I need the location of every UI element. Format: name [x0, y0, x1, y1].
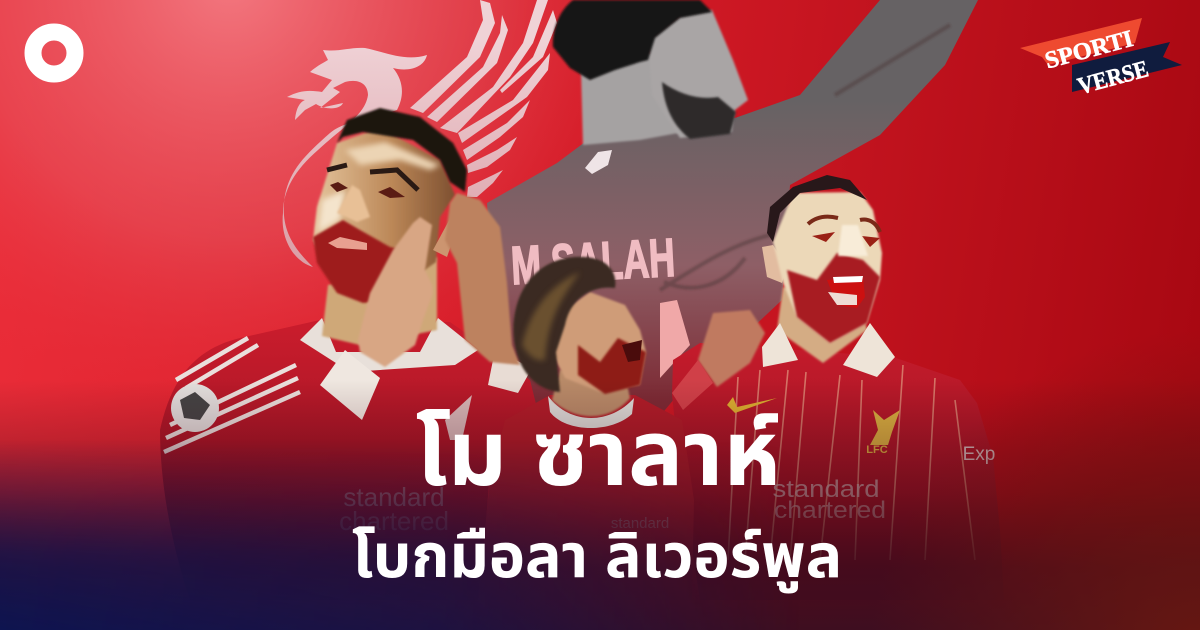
salah back view in grey jersey	[487, 0, 978, 440]
cheek highlight	[318, 190, 345, 232]
beard	[578, 338, 646, 394]
neck	[322, 257, 437, 345]
right player celebrating	[672, 175, 1004, 600]
face	[313, 128, 455, 295]
eyes	[812, 232, 880, 247]
navy ribbon	[1072, 42, 1182, 92]
orange ribbon	[1020, 18, 1142, 65]
bottom navy fade overlay	[0, 375, 1200, 630]
lips	[328, 237, 367, 250]
subtitle: โบกมือลา ลิเวอร์พูล	[352, 522, 842, 593]
sponsor text: standard	[343, 482, 445, 512]
sleeve cuff right	[488, 350, 532, 393]
shirt number fragment	[660, 300, 690, 378]
hair	[514, 257, 615, 392]
beard	[787, 253, 880, 343]
middle small player	[478, 257, 694, 600]
lfc crest	[866, 410, 900, 456]
back hand	[445, 193, 520, 365]
ear	[762, 245, 787, 283]
name print: M.SALAH	[510, 228, 677, 296]
sponsor text: standard	[611, 515, 669, 532]
jersey folds	[660, 25, 950, 290]
ear	[433, 213, 458, 257]
left player clapping	[160, 108, 540, 600]
hair	[767, 175, 867, 242]
eyes	[330, 182, 405, 198]
lfc crest: LFC	[866, 444, 888, 456]
beard	[313, 220, 428, 303]
bird head and body	[283, 48, 427, 267]
collar	[762, 323, 895, 377]
cuff	[320, 350, 380, 420]
face	[550, 292, 646, 392]
open mouth	[827, 277, 865, 308]
shirt	[160, 320, 540, 600]
verse text: VERSE	[1075, 56, 1151, 100]
left player clapping: chartered	[339, 506, 449, 536]
sporti text: SPORTI	[1042, 26, 1136, 74]
logo: white ring	[33, 32, 75, 74]
face	[773, 192, 882, 343]
sleeve sponsor: Exp	[963, 444, 995, 465]
front hand	[358, 217, 433, 367]
mouth	[622, 340, 642, 362]
hair highlight	[522, 272, 580, 360]
hair	[553, 0, 712, 80]
nose	[337, 185, 370, 222]
eyebrows	[327, 165, 418, 190]
shirt	[672, 343, 1004, 600]
fist	[698, 310, 765, 387]
wrist sleeve	[672, 360, 713, 410]
neck	[552, 370, 630, 416]
nike swoosh	[727, 397, 777, 413]
right player celebrating: chartered	[774, 497, 886, 524]
neck	[581, 50, 722, 145]
grey jersey	[487, 0, 978, 440]
shirt	[478, 395, 694, 600]
teeth	[833, 276, 863, 283]
collar	[300, 318, 478, 372]
logo: sportiverse ribbons	[1020, 18, 1182, 100]
hair	[337, 108, 467, 192]
title: player name: โม ซาลาห์	[416, 403, 780, 505]
neck	[777, 287, 867, 363]
liverpool liver bird crest	[283, 0, 557, 267]
nose	[838, 225, 868, 256]
sponsor text: standard	[772, 476, 880, 503]
eyebrows	[808, 217, 880, 232]
tongue	[828, 292, 857, 305]
pinstripes	[728, 365, 975, 560]
collar	[548, 396, 634, 428]
forehead highlight	[345, 142, 440, 170]
face	[648, 10, 748, 138]
lfc badge	[445, 395, 472, 440]
beard	[662, 82, 736, 139]
champions league badge	[171, 384, 219, 432]
jersey badge	[585, 150, 612, 174]
white sleeve stripes	[164, 338, 300, 452]
wing feathers	[410, 0, 495, 113]
